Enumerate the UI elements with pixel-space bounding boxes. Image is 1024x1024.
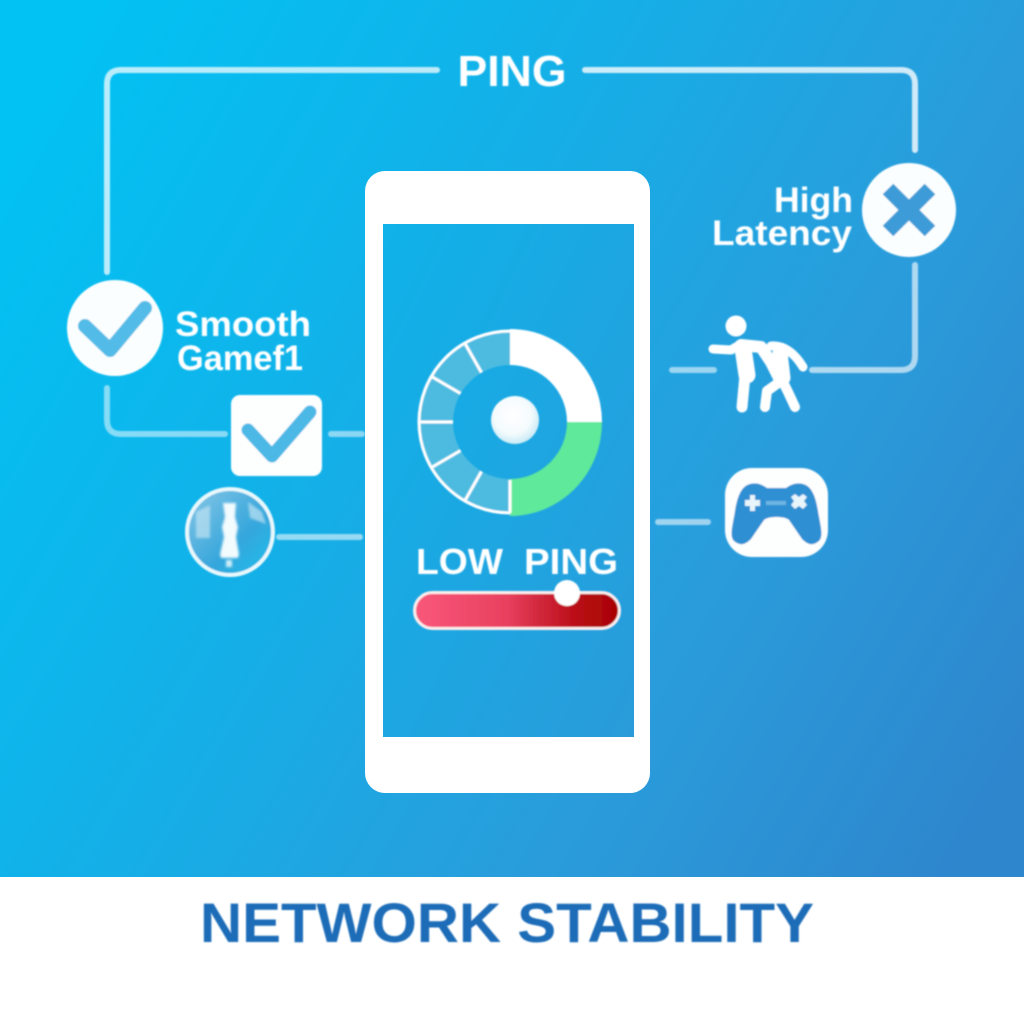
high latency label: Latency [712,214,853,253]
high latency x icon [862,163,956,257]
check box icon [231,395,322,476]
network tower circle icon [187,489,273,575]
gauge [418,329,602,516]
smooth gameplay label: Smooth [175,305,311,344]
ping slider [414,580,620,628]
game controller icon [725,468,828,557]
title: ping: PING [458,47,566,96]
phone [365,171,650,793]
gauge: center dot [491,396,539,444]
people icon [713,316,803,407]
high latency label: High [774,181,853,220]
slider knob [554,580,580,606]
gauge: green segment [510,422,602,516]
low ping label: PING [524,541,618,582]
phone screen [383,224,634,737]
phone body [365,171,650,793]
gauge: white segment [510,329,602,422]
connector lines [107,70,915,537]
bottom title band [0,877,1024,1024]
low ping label: LOW [416,541,503,582]
gauge: remaining segments [418,330,510,514]
smooth gameplay label: Gamef1 [177,339,303,378]
smooth gameplay icon [67,280,163,376]
gauge: outline and ticks [419,331,510,513]
title: network stability: NETWORK STABILITY [200,891,814,954]
slider track [414,592,620,628]
